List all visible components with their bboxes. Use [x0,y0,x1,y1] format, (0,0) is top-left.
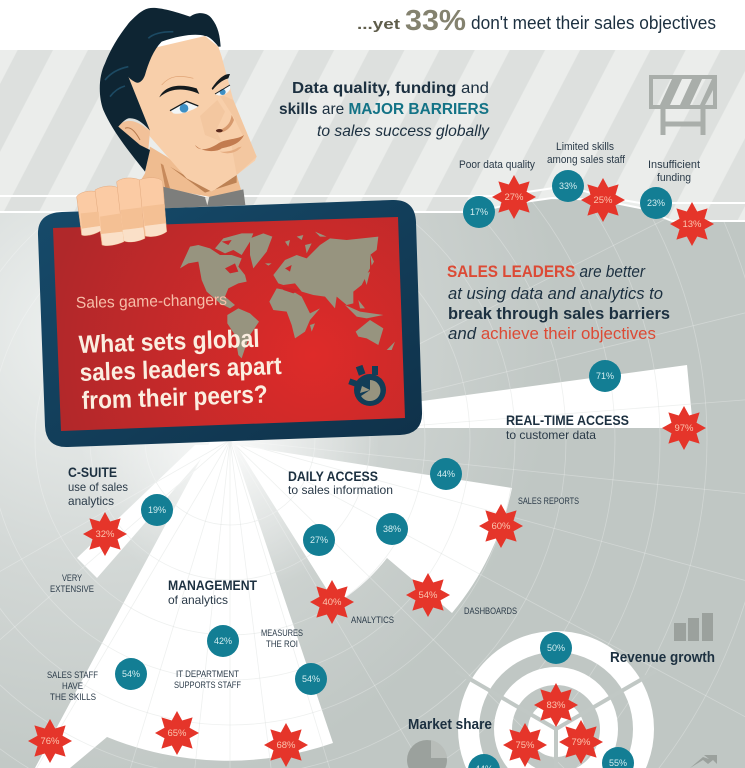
circle 33%: 33% [559,181,577,191]
star 25%: 25% [593,195,613,206]
circle 27%: 27% [310,535,328,545]
circle 55% [602,747,634,768]
barrier label: insufficient funding: Insufficient [648,159,700,171]
barriers heading: Data quality, funding and [292,80,489,97]
icon: bar chart [674,613,713,641]
man ear [118,121,150,150]
tablet text [76,292,283,415]
top headline [357,5,716,37]
circle 23% [640,187,672,219]
star 76% [28,719,72,763]
icon: stopwatch [348,365,386,406]
top headline: ...yet [357,16,400,33]
it department label: SUPPORTS STAFF [174,680,241,691]
star 97% [662,406,706,450]
circle 44%: 44% [437,469,455,479]
star 13%: 13% [682,219,702,230]
sales leaders text: and achieve their objectives [448,324,656,343]
star 83%: 83% [546,700,566,711]
panel: c-suite wedge [77,445,213,578]
star 97%: 97% [674,423,694,434]
measures the roi label: THE ROI [266,639,298,650]
circle 42% [207,625,239,657]
star 79% [559,720,603,764]
world map [180,232,395,358]
very extensive label: VERY [62,573,83,584]
circle 38%: 38% [383,524,401,534]
icon: pie chart [407,740,447,768]
barrier label: limited skills: Limited skills [556,141,614,153]
barrier label: poor data quality: Poor data quality [459,159,535,171]
grey lower background [0,198,745,768]
circle 19% [141,494,173,526]
circle 50%: 50% [547,643,565,653]
top headline: 33% [405,5,466,37]
star 13% [670,202,714,246]
circle 71%: 71% [596,371,614,381]
barriers heading: skills are MAJOR BARRIERS [279,101,489,118]
circle 54% left: 54% [122,669,140,679]
man neck [140,147,245,203]
panel: real-time access wedge [410,365,693,428]
sales staff label [47,670,98,703]
sales leaders text: SALES LEADERS are better [447,262,646,281]
man hair [100,8,221,172]
tablet text: from their peers? [81,381,268,415]
man eyebrows [159,74,230,97]
circle 44% [430,458,462,490]
real-time access label [506,412,629,442]
panel: daily access wedge [236,445,512,613]
c-suite label: analytics [68,494,114,508]
star 60%: 60% [491,521,511,532]
circle 17%: 17% [470,207,488,217]
man mouth [195,135,244,151]
panel: management wedge [35,440,333,768]
man figure [100,8,257,208]
circle 54% right: 54% [302,674,320,684]
sales reports label: SALES REPORTS [518,496,579,507]
circle 17% [463,196,495,228]
star 68%: 68% [276,740,296,751]
star 75% [503,723,547,767]
dashboards label: DASHBOARDS [464,606,517,617]
icon: growth arrow [690,755,717,768]
star 54% [406,573,450,617]
star 83% [534,683,578,727]
star 40% [310,580,354,624]
striped upper background [0,50,745,225]
circle 33% [552,170,584,202]
measures the roi label [261,628,303,650]
star 54%: 54% [418,590,438,601]
tablet text: sales leaders apart [79,352,283,387]
circle 54% right [295,663,327,695]
circle 19%: 19% [148,505,166,515]
circle 55%: 55% [609,758,627,768]
star 79%: 79% [571,737,591,748]
sales staff label: THE SKILLS [50,692,96,703]
sales leaders text: at using data and analytics to [448,284,663,303]
daily access label: DAILY ACCESS [288,468,378,484]
icon: roadblock barrier [651,77,715,135]
star 75%: 75% [515,740,535,751]
man nose [216,115,234,132]
barriers heading: to sales success globally [317,123,490,140]
very extensive label [50,573,94,595]
star 60% [479,504,523,548]
c-suite label [68,464,128,508]
barrier label: limited skills [547,141,626,166]
it department label: IT DEPARTMENT [176,669,239,680]
barrier label: insufficient funding: funding [657,172,691,184]
circle partially cropped [468,754,500,768]
circle 50% [540,632,572,664]
man face [128,36,257,192]
man collar [163,187,245,208]
barrier label: limited skills: among sales staff [547,154,626,166]
star 68% [264,723,308,767]
circle 27% [303,524,335,556]
hand over tablet [77,178,167,246]
management label [168,577,257,607]
circle 71% [589,360,621,392]
star 27% [492,175,536,219]
sales staff label: HAVE [62,681,83,692]
it department label [174,669,241,691]
tablet frame [38,200,422,447]
c-suite label: C-SUITE [68,464,117,480]
management label: of analytics [168,593,228,607]
star 76%: 76% [40,736,60,747]
tablet text: What sets global [78,325,260,359]
real-time access label: REAL-TIME ACCESS [506,412,629,428]
management label: MANAGEMENT [168,577,257,593]
tablet text: Sales game-changers [76,292,227,312]
circle 23%: 23% [647,198,665,208]
star 27%: 27% [504,192,524,203]
revenue growth label: Revenue growth [610,649,715,666]
c-suite label: use of sales [68,480,128,494]
star 25% [581,178,625,222]
circle 38% [376,513,408,545]
very extensive label: EXTENSIVE [50,584,94,595]
star 65% [155,711,199,755]
sales leaders text [447,262,670,343]
market share label: Market share [408,716,492,733]
sales staff label: SALES STAFF [47,670,98,681]
analytics label: ANALYTICS [351,615,394,626]
circle 42%: 42% [214,636,232,646]
star 32% [83,512,127,556]
barriers heading [279,80,490,140]
daily access label: to sales information [288,483,393,497]
tablet [38,200,422,447]
daily access label [288,468,393,497]
star 40%: 40% [322,597,342,608]
circle 54% left [115,658,147,690]
top headline: don't meet their sales objectives [471,13,716,33]
barrier label: insufficient funding [648,159,700,184]
sales leaders text: break through sales barriers [448,304,670,323]
star 65%: 65% [167,728,187,739]
man eyes [170,102,198,114]
tablet red screen [53,217,405,431]
measures the roi label: MEASURES [261,628,303,639]
target rings chart [456,642,656,768]
real-time access label: to customer data [506,428,596,442]
star 32%: 32% [95,529,115,540]
